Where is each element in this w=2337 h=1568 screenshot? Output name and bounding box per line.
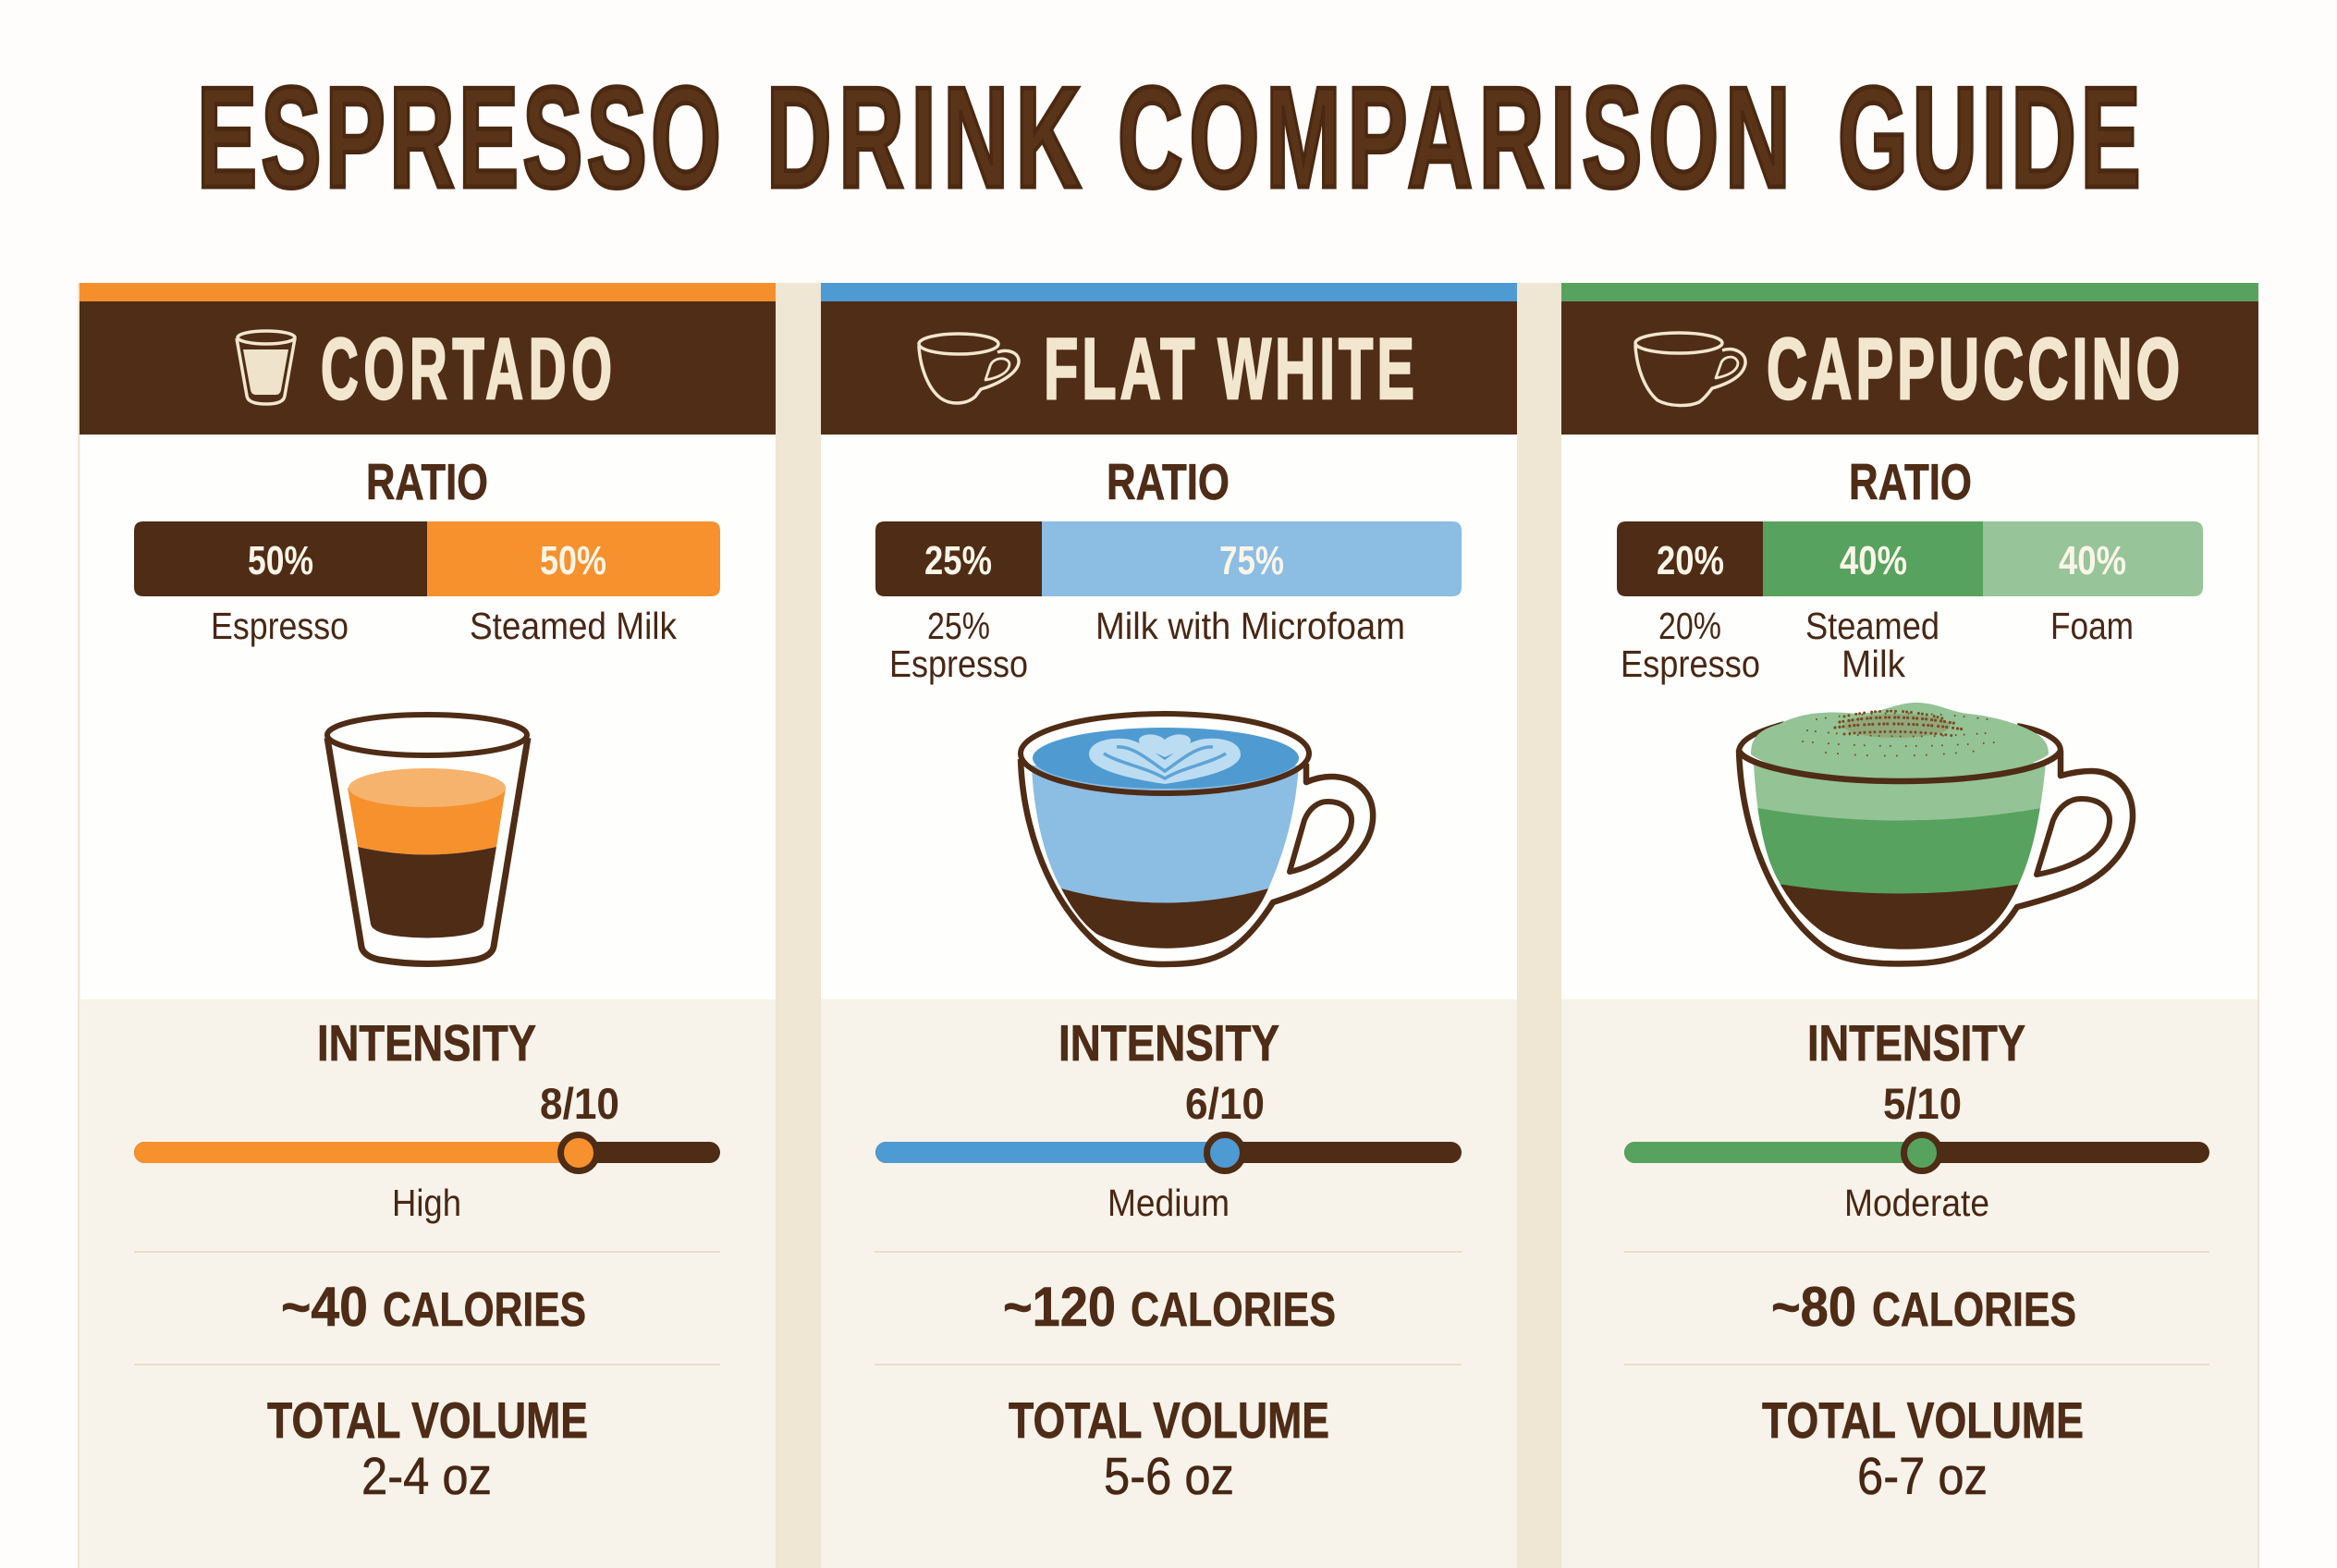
calories: CALORIES (1872, 1283, 2076, 1337)
calories: CALORIES (383, 1283, 586, 1337)
title: DRINK (766, 58, 1081, 218)
intensity level: High (392, 1182, 461, 1224)
panel: cortado (78, 283, 776, 1568)
intensity score: 5/10 (1883, 1079, 1962, 1128)
ratio bar: 25% (924, 538, 992, 583)
calories: ~40 (281, 1276, 368, 1338)
ratio bar (875, 521, 1462, 596)
intensity heading: INTENSITY (317, 1014, 536, 1072)
total volume (267, 1391, 588, 1506)
ratio heading: RATIO (1107, 453, 1230, 510)
calories: ~120 (1003, 1276, 1116, 1338)
ratio heading: RATIO (366, 453, 488, 510)
intensity score: 6/10 (1185, 1079, 1265, 1128)
total volume: 5-6 oz (1104, 1447, 1234, 1506)
total volume: 2-4 oz (361, 1447, 492, 1506)
cappuccino header (1561, 301, 2258, 435)
cortado header (80, 301, 776, 435)
intensity heading: INTENSITY (1807, 1014, 2025, 1072)
ratio labels: 25% (927, 605, 990, 647)
calories (281, 1276, 586, 1338)
calories (1003, 1276, 1336, 1338)
cortado name: CORTADO (321, 321, 612, 418)
intensity heading: INTENSITY (1058, 1014, 1279, 1072)
ratio labels: Steamed Milk (470, 605, 677, 647)
ratio labels: Espresso (889, 643, 1028, 685)
intensity slider (1624, 1135, 2209, 1170)
ratio labels: Milk with Microfoam (1095, 605, 1405, 647)
total volume: TOTAL VOLUME (1009, 1391, 1329, 1449)
layered liquid (1754, 763, 2046, 949)
total volume (1762, 1391, 2084, 1506)
intensity level: Moderate (1844, 1182, 1989, 1224)
ratio labels (889, 605, 1405, 685)
cappuccino name: CAPPUCCINO (1767, 320, 2180, 417)
ratio bar: 50% (540, 538, 606, 583)
intensity score: 8/10 (540, 1079, 619, 1128)
ratio bar: 40% (2059, 538, 2126, 583)
illustration: cappuccino cup (1738, 703, 2133, 963)
ratio bar: 20% (1657, 538, 1724, 583)
title: ESPRESSO (197, 58, 721, 218)
title: COMPARISON (1118, 58, 1791, 218)
ratio bar (1617, 521, 2203, 596)
ratio heading: RATIO (1849, 453, 1972, 510)
icon: cappuccino cup (1635, 333, 1745, 406)
total volume: TOTAL VOLUME (267, 1391, 588, 1449)
calories: ~80 (1771, 1276, 1856, 1338)
ratio bar: 50% (248, 538, 313, 583)
panel: flat white (821, 283, 1517, 1568)
ratio bar: 40% (1840, 538, 1907, 583)
ratio labels: Foam (2050, 605, 2134, 647)
title (197, 58, 2141, 218)
calories (1771, 1276, 2076, 1338)
ratio labels: 20% (1658, 605, 1721, 647)
foam with cocoa dusting (1751, 703, 2049, 777)
ratio labels: Milk (1841, 643, 1905, 685)
intensity slider (134, 1135, 720, 1170)
illustration: flat white cup (1021, 714, 1373, 964)
icon: flat white cup (919, 334, 1019, 403)
ratio labels (1621, 605, 2134, 685)
illustration: cortado glass (327, 715, 528, 963)
ratio labels: Steamed (1805, 605, 1939, 647)
flat white header (821, 301, 1517, 435)
icon: cortado glass (237, 331, 295, 404)
panel: cappuccino (1561, 283, 2259, 1568)
ratio labels (211, 605, 677, 647)
title: GUIDE (1838, 58, 2141, 218)
ratio labels: Espresso (211, 605, 349, 647)
ratio bar: 75% (1219, 538, 1284, 583)
flat white name: FLAT WHITE (1044, 320, 1414, 417)
total volume: 6-7 oz (1857, 1447, 1988, 1506)
latte art (1089, 734, 1241, 784)
total volume: TOTAL VOLUME (1762, 1391, 2084, 1449)
calories: CALORIES (1131, 1283, 1336, 1337)
intensity level: Medium (1107, 1182, 1230, 1224)
ratio bar (134, 521, 720, 596)
total volume (1009, 1391, 1329, 1506)
ratio labels: Espresso (1621, 643, 1760, 685)
intensity slider (875, 1135, 1462, 1170)
